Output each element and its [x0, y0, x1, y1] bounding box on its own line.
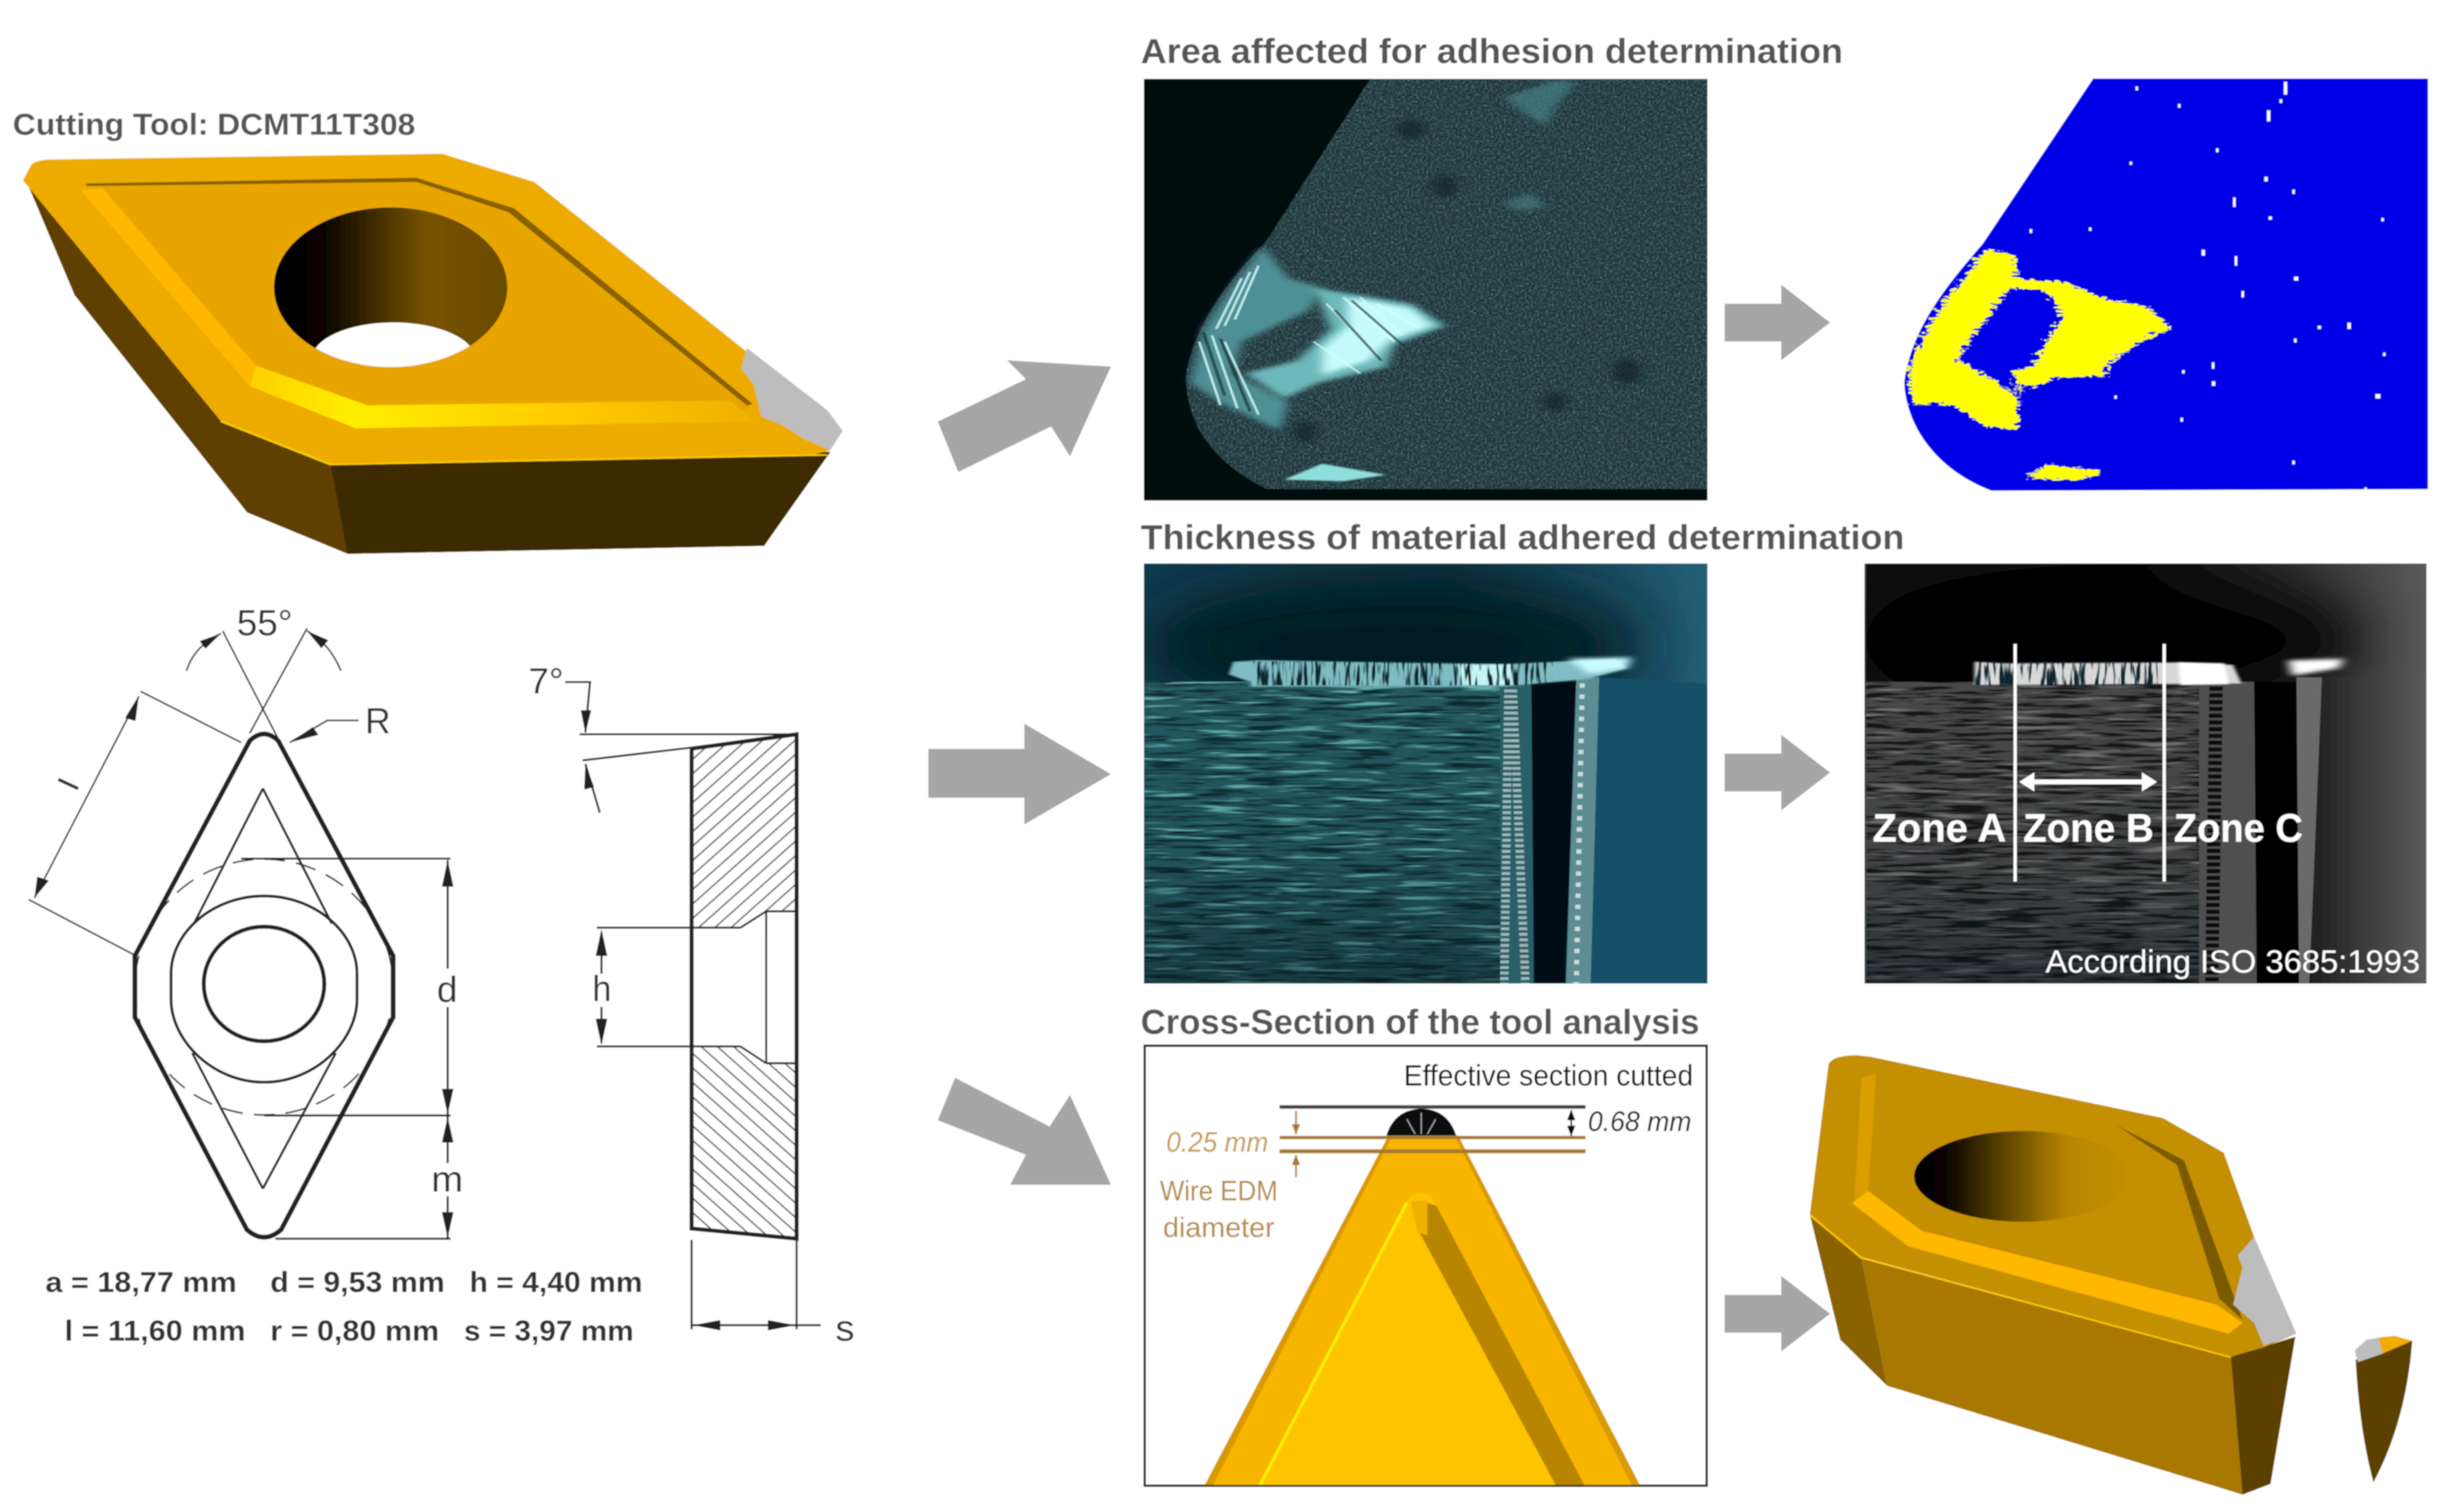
arrow: colour to greyscale — [1725, 735, 1830, 811]
tool tip — [1204, 1136, 1641, 1487]
dimensions list: d = 9,53 mm — [270, 1266, 445, 1298]
illustration: cut-off wedge — [2355, 1336, 2412, 1483]
dimensions list: r = 0,80 mm — [270, 1314, 439, 1347]
panel: cross-section diagram: 0.25 mm — [1166, 1127, 1268, 1158]
drawing labels: h — [592, 968, 611, 1009]
zone labels: Zone B — [2023, 806, 2154, 850]
panel: cross-section diagram: Wire EDM — [1160, 1176, 1278, 1207]
photo: thickness micrograph greyscale with zones — [1861, 564, 2428, 984]
arrow: tool to area affected — [938, 360, 1111, 472]
zone B double arrow — [2019, 772, 2157, 791]
arrow: cross-section to cut tool — [1725, 1276, 1830, 1352]
zone divider lines — [2015, 644, 2164, 882]
zone labels: Zone C — [2174, 806, 2303, 850]
diagram labels: Effective section cutted — [1404, 1059, 1693, 1092]
dimension arrows — [1292, 1109, 1575, 1177]
dimensions list: h = 4,40 mm — [470, 1266, 642, 1298]
hole — [273, 206, 509, 368]
photo: thickness micrograph colour — [1140, 564, 1707, 984]
drawing labels: s — [835, 1308, 855, 1349]
heading: cutting tool: Cutting Tool: DCMT11T308 — [13, 108, 415, 142]
heading: area affected: Area affected for adhesion determination — [1141, 32, 1843, 71]
arrow: tool to thickness — [929, 724, 1111, 824]
worn grey tip — [741, 348, 843, 450]
arrow: tool to cross-section — [938, 1078, 1111, 1184]
drawing labels: l — [53, 774, 86, 795]
dimensions list: a = 18,77 mm — [45, 1266, 237, 1298]
drawing labels: 55° — [237, 603, 293, 643]
dimensions list: l = 11,60 mm — [65, 1314, 246, 1347]
dimensions list — [45, 1266, 642, 1347]
technical drawing: top view — [29, 628, 454, 1239]
zone labels: Zone A — [1872, 806, 2006, 850]
drawing labels: d — [437, 969, 458, 1010]
illustration: 3D cutting tool insert — [23, 154, 843, 554]
panel: cross-section diagram — [1145, 1046, 1707, 1487]
drawing labels: 7° — [529, 661, 564, 701]
photo: adhesion area micrograph — [1144, 79, 1707, 501]
adhered material cap — [1386, 1109, 1456, 1136]
panel: cross-section diagram: 0.68 mm — [1588, 1106, 1692, 1137]
drawing labels — [53, 603, 855, 1349]
drawing labels: R — [365, 701, 391, 741]
heading: thickness: Thickness of material adhered determination — [1141, 518, 1904, 557]
technical drawing: section view — [565, 682, 821, 1330]
worn grey tip — [2233, 1237, 2297, 1346]
cut lines — [1279, 1106, 1586, 1153]
panel: cross-section diagram: diameter — [1163, 1212, 1275, 1243]
hole — [1914, 1131, 2132, 1222]
illustration: sectioned tool — [1809, 1055, 2297, 1494]
heading: cross-section: Cross-Section of the tool analysis — [1141, 1003, 1699, 1042]
image: segmented adhesion map — [1904, 79, 2428, 491]
standard note: According ISO 3685:1993 — [2045, 945, 2420, 980]
arrow: micrograph to segmentation — [1725, 285, 1830, 360]
drawing labels: m — [431, 1159, 463, 1200]
zone labels — [1872, 813, 2302, 843]
dimensions list: s = 3,97 mm — [464, 1314, 634, 1347]
